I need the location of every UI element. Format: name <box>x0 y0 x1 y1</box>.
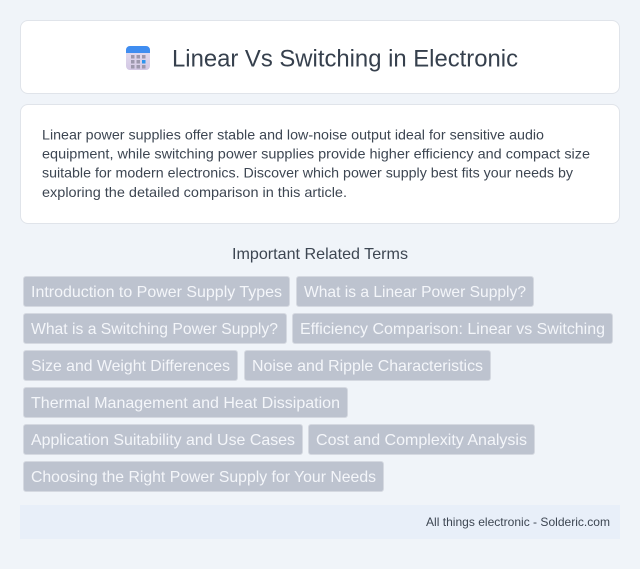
tag: What is a Linear Power Supply? <box>296 276 534 307</box>
tag: Efficiency Comparison: Linear vs Switching <box>292 313 613 344</box>
related terms heading: Important Related Terms <box>232 246 408 263</box>
tag: Noise and Ripple Characteristics <box>244 350 491 381</box>
intro paragraph: exploring the detailed comparison in this article. <box>42 184 347 200</box>
tag: Thermal Management and Heat Dissipation <box>23 387 348 418</box>
tag: Size and Weight Differences <box>23 350 238 381</box>
icon: calendar <box>126 46 150 70</box>
tag: Cost and Complexity Analysis: Cost and Complexity Analysis <box>316 432 527 449</box>
tag: What is a Linear Power Supply?: What is a Linear Power Supply? <box>304 284 526 301</box>
tag: Application Suitability and Use Cases: Application Suitability and Use Cases <box>31 432 295 449</box>
tag: Choosing the Right Power Supply for Your Needs: Choosing the Right Power Supply for Your Needs <box>31 469 376 486</box>
tag: Size and Weight Differences: Size and Weight Differences <box>31 358 230 375</box>
tag: Introduction to Power Supply Types <box>23 276 290 307</box>
tag: Efficiency Comparison: Linear vs Switching: Efficiency Comparison: Linear vs Switching <box>300 321 605 338</box>
header panel <box>20 20 620 94</box>
tag: Thermal Management and Heat Dissipation: Thermal Management and Heat Dissipation <box>31 395 340 412</box>
footer bar <box>20 505 620 539</box>
tag: Application Suitability and Use Cases <box>23 424 303 455</box>
tag: Choosing the Right Power Supply for Your Needs <box>23 461 384 492</box>
tag: What is a Switching Power Supply?: What is a Switching Power Supply? <box>31 321 278 338</box>
intro paragraph: Linear power supplies offer stable and low-noise output ideal for sensitive audio <box>42 126 544 142</box>
footer credit: All things electronic - Solderic.com <box>426 515 610 529</box>
tag: Introduction to Power Supply Types: Introduction to Power Supply Types <box>31 284 282 301</box>
tag: Noise and Ripple Characteristics: Noise and Ripple Characteristics <box>252 358 483 375</box>
intro text panel <box>20 104 620 224</box>
tag: Cost and Complexity Analysis <box>308 424 535 455</box>
intro paragraph <box>42 126 590 200</box>
intro paragraph: equipment, while switching power supplies provide higher efficiency and compact size <box>42 146 590 162</box>
intro paragraph: suitable for modern electronics. Discover which power supply best fits your needs by <box>42 164 573 180</box>
title: Linear Vs Switching in Electronic <box>172 46 518 72</box>
tag: What is a Switching Power Supply? <box>23 313 287 344</box>
